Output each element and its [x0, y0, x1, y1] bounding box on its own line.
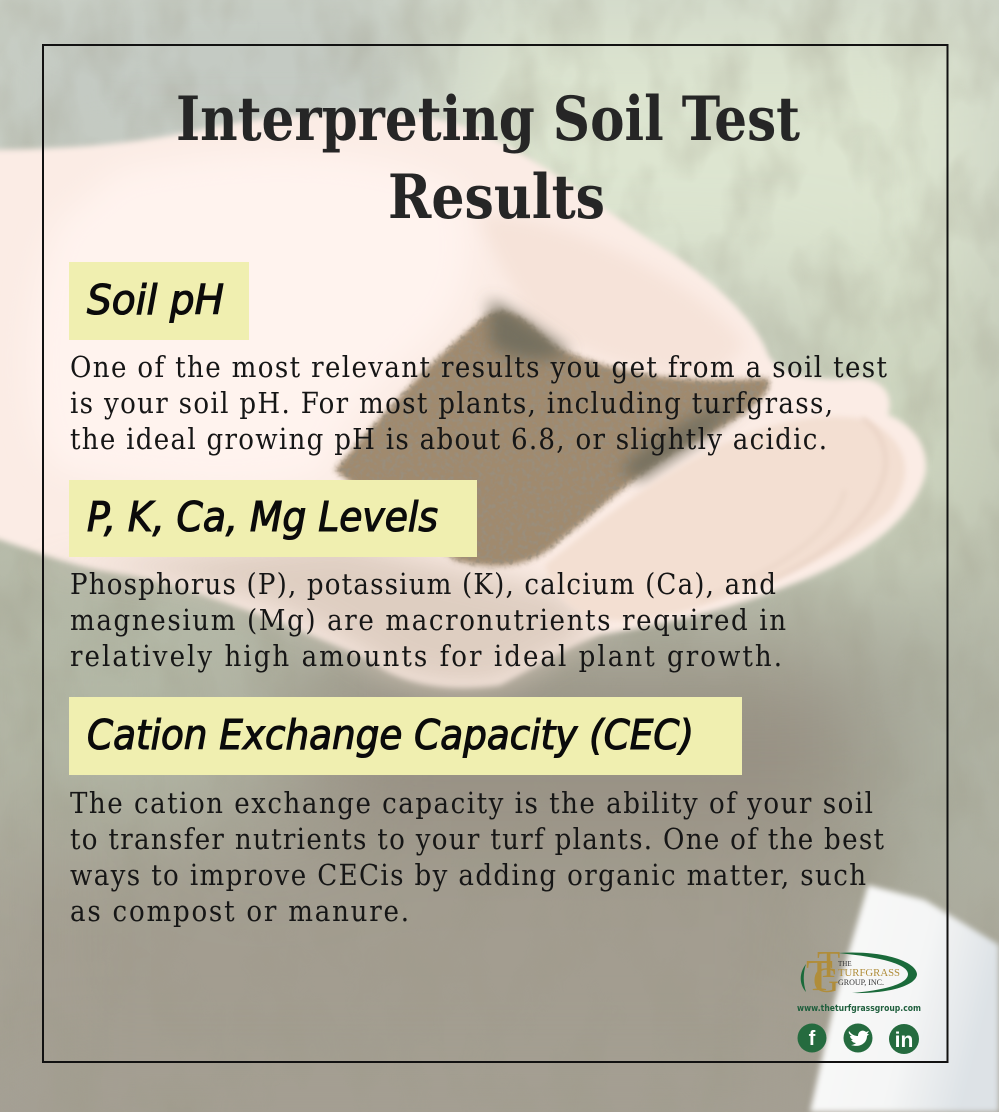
- text: macronutrient description: relatively high amounts for ideal plant growth.: [70, 639, 782, 673]
- logo: The Turfgrass Group: T: [806, 951, 833, 1000]
- text: macronutrient description: magnesium (Mg) are macronutrients required in: [70, 603, 786, 637]
- logo: The Turfgrass Group: T: [817, 944, 840, 986]
- hand: [0, 113, 926, 688]
- logo: The Turfgrass Group: GROUP, INC.: [838, 978, 884, 987]
- heading: P, K, Ca, Mg levels: P, K, Ca, Mg Levels: [87, 493, 438, 541]
- text: soil pH description: One of the most relevant results you get from a soil test: [70, 350, 888, 384]
- logo: The Turfgrass Group: THE: [838, 960, 852, 968]
- logo: The Turfgrass Group: G: [813, 960, 839, 1000]
- text: CEC description: The cation exchange capacity is the ability of your soil: [70, 786, 873, 820]
- text: CEC description: to transfer nutrients to your turf plants. One of the best: [70, 822, 885, 856]
- title: Interpreting Soil Test: [176, 84, 800, 155]
- heading: cation exchange capacity: [69, 697, 742, 775]
- text: soil pH description: is your soil pH. For most plants, including turfgrass,: [70, 386, 833, 420]
- heading: soil pH: Soil pH: [87, 276, 224, 324]
- text: CEC description: [70, 786, 885, 928]
- heading: P, K, Ca, Mg levels: [69, 480, 477, 557]
- logo: The Turfgrass Group: [801, 944, 917, 1000]
- website url: www.theturfgrassgroup.com: [797, 1004, 921, 1014]
- fingers: [545, 417, 905, 621]
- title: [176, 84, 800, 233]
- text: soil pH description: the ideal growing pH is about 6.8, or slightly acidic.: [70, 422, 827, 456]
- shovel: [810, 885, 999, 1112]
- icon: twitter: [844, 1024, 872, 1052]
- heading: cation exchange capacity: Cation Exchange Capacity (CEC): [87, 711, 694, 759]
- text: CEC description: ways to improve CECis by adding organic matter, such: [70, 858, 866, 892]
- text: CEC description: as compost or manure.: [70, 894, 409, 928]
- icon: linkedin: in: [895, 1029, 913, 1052]
- icon: facebook: [798, 1024, 826, 1052]
- title: Results: [388, 162, 605, 233]
- panel: soil pH: [69, 262, 888, 456]
- panel: macronutrient levels: [69, 480, 786, 673]
- soil: [335, 312, 769, 566]
- icon: facebook: f: [809, 1028, 816, 1050]
- heading: soil pH: [69, 262, 249, 340]
- text: macronutrient description: [70, 567, 786, 673]
- text: macronutrient description: Phosphorus (P), potassium (K), calcium (Ca), and: [70, 567, 776, 601]
- text: soil pH description: [70, 350, 888, 456]
- panel: cation exchange capacity: [69, 697, 885, 928]
- icon: linkedin: [889, 1024, 919, 1054]
- logo: The Turfgrass Group: TURFGRASS: [838, 967, 900, 979]
